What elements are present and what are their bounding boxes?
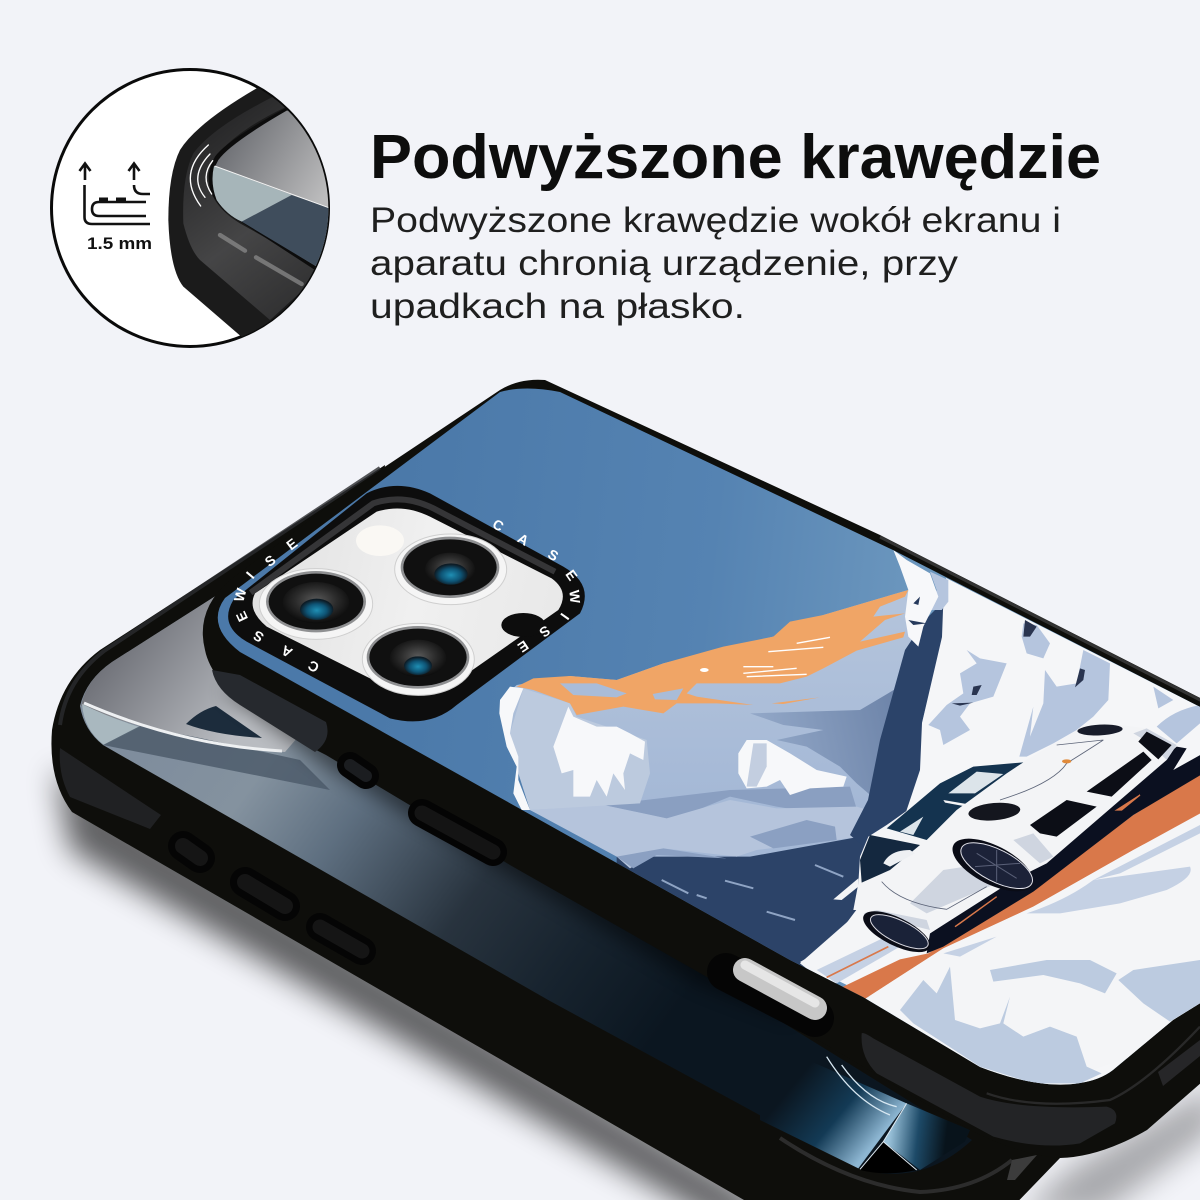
ring lettering CASEWISE: S — [261, 552, 279, 570]
side speaker right — [1158, 1040, 1200, 1086]
ring lettering CASEWISE: A — [515, 530, 532, 549]
shadow of front phone on back screen — [220, 690, 800, 1020]
headlights — [968, 802, 1020, 821]
lens: top right — [395, 534, 507, 605]
left road verge — [800, 921, 848, 984]
lower snow — [866, 814, 1200, 1084]
ring lettering CASEWISE: W — [231, 586, 250, 603]
ring lettering CASEWISE: S — [250, 627, 266, 646]
ring lettering CASEWISE: I — [243, 568, 257, 582]
side switch — [350, 765, 366, 776]
under car shadow — [927, 747, 1200, 953]
back phone buttons — [183, 846, 362, 951]
ring lettering CASEWISE: C — [490, 516, 507, 534]
side window — [860, 835, 920, 883]
snow shadows at lower corner — [900, 960, 1200, 1083]
text block: description: aparatu chronią urządzenie, przy — [370, 244, 959, 283]
ring lettering CASEWISE: S — [536, 622, 553, 641]
ring lettering CASEWISE: A — [278, 642, 295, 661]
rear wheel — [863, 911, 930, 952]
front case lower corner grip — [862, 1027, 1200, 1146]
flash — [356, 525, 404, 556]
text block: description: Podwyższone krawędzie wokół ekranu i — [370, 201, 1061, 240]
ring lettering CASEWISE: E — [562, 567, 581, 583]
back case lower bevel — [780, 1138, 1012, 1192]
ring lettering CASEWISE: W — [566, 589, 584, 605]
front wheel — [952, 838, 1033, 891]
sensor — [501, 613, 545, 637]
front case grip — [212, 670, 328, 752]
ring lettering CASEWISE: S — [545, 546, 561, 564]
icon: raised edge diagram with arrows — [80, 164, 150, 224]
mountains — [499, 590, 923, 973]
road — [842, 772, 1200, 1000]
snow slope — [800, 578, 1200, 1090]
back phone lower speaker — [1007, 1155, 1037, 1180]
grilles — [1030, 732, 1172, 837]
top rim of case — [880, 537, 1200, 705]
text block: description — [370, 201, 1061, 326]
windshield — [887, 762, 1023, 840]
car and road — [800, 724, 1200, 1084]
lower screen wallpaper — [760, 1057, 970, 1173]
charging port — [726, 965, 815, 1018]
back phone in black case — [51, 465, 1060, 1200]
shadow under back phone — [55, 770, 800, 1200]
ring lettering CASEWISE: E — [283, 535, 300, 553]
label: 1.5 mm: 1.5 mm — [87, 234, 152, 253]
dark shadowed gorge — [850, 608, 944, 838]
ring lettering CASEWISE: C — [305, 657, 322, 676]
sky — [200, 380, 1200, 1100]
text block: description: upadkach na płasko. — [370, 287, 745, 326]
shadow under front phone corner — [1020, 1085, 1200, 1200]
back case grip texture — [60, 748, 161, 829]
snow cliff and shadow patches — [893, 550, 1200, 757]
camera window — [253, 508, 563, 694]
ring lettering CASEWISE — [231, 516, 584, 676]
ring lettering CASEWISE: I — [557, 610, 573, 623]
volume button — [422, 813, 493, 852]
panel: printed back artwork — [200, 380, 1200, 1133]
phone corner detail photo — [168, 88, 328, 336]
back phone screen — [80, 590, 972, 1174]
ring lettering CASEWISE: E — [515, 637, 532, 656]
lens: left — [259, 569, 373, 639]
camera ring — [228, 486, 585, 721]
car body — [853, 748, 1174, 934]
hood lines and badge — [882, 740, 1103, 909]
heading: Podwyższone krawędzie — [370, 123, 1101, 192]
callout: raised edge close-up circle — [52, 70, 340, 360]
ring lettering CASEWISE: E — [232, 609, 251, 624]
front phone in black case — [203, 380, 1200, 1158]
camera module — [228, 486, 585, 721]
lens: bottom — [362, 623, 474, 695]
